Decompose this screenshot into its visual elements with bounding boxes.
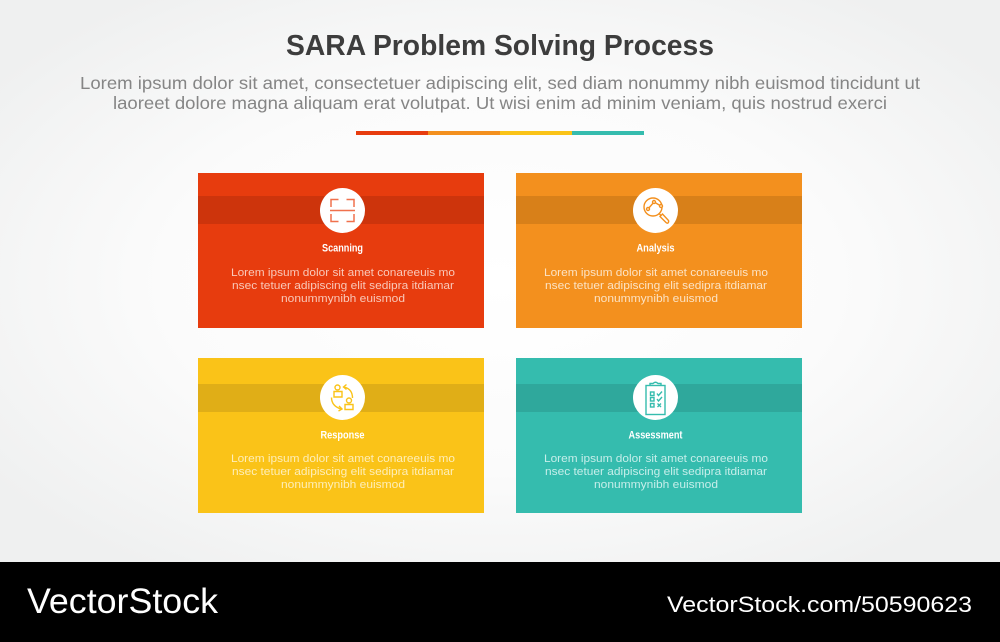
body text: assessment: nsec tetuer adipiscing elit sedipra itdiamar — [545, 466, 767, 478]
body text: assessment — [544, 453, 768, 491]
heading: response: Response — [320, 430, 364, 442]
subtitle text block: laoreet dolore magna aliquam erat volutpat. Ut wisi enim ad minim veniam, quis nostrud exerci — [113, 93, 887, 113]
panel: assessment — [516, 358, 802, 513]
footer image id: VectorStock.com/50590623 — [667, 592, 972, 617]
body text: response: nonummynibh euismod — [281, 479, 405, 491]
footer bar — [0, 562, 1000, 642]
title: SARA Problem Solving Process — [286, 30, 714, 62]
subtitle text block: Lorem ipsum dolor sit amet, consectetuer adipiscing elit, sed diam nonummy nibh euismod tincidunt ut — [80, 73, 920, 93]
four-colour divider — [356, 131, 644, 135]
body text: analysis: nsec tetuer adipiscing elit sedipra itdiamar — [545, 280, 767, 292]
heading: scanning: Scanning — [322, 242, 363, 254]
body text: response: Lorem ipsum dolor sit amet conareeuis mo — [231, 453, 455, 465]
body text: analysis: Lorem ipsum dolor sit amet conareeuis mo — [544, 267, 768, 279]
heading: assessment: Assessment — [628, 430, 683, 442]
icon: magnifier with graph — [644, 198, 669, 223]
icon: scan frame — [330, 200, 355, 222]
body text: assessment: nonummynibh euismod — [594, 479, 718, 491]
panel: scanning — [198, 173, 484, 328]
body text: scanning: Lorem ipsum dolor sit amet conareeuis mo — [231, 267, 455, 279]
icon: clipboard checklist — [646, 382, 665, 414]
panel: response — [198, 358, 484, 513]
body text: scanning: nsec tetuer adipiscing elit sedipra itdiamar — [232, 280, 454, 292]
panel: analysis — [516, 173, 802, 328]
body text: analysis — [544, 267, 768, 305]
subtitle text block — [80, 73, 920, 113]
body text: response — [231, 453, 455, 491]
body text: analysis: nonummynibh euismod — [594, 293, 718, 305]
heading: analysis: Analysis — [636, 242, 674, 254]
body text: scanning — [231, 267, 455, 305]
footer logo text: VectorStock — [27, 582, 219, 621]
body text: assessment: Lorem ipsum dolor sit amet conareeuis mo — [544, 453, 768, 465]
icon: people exchange — [332, 384, 353, 411]
body text: scanning: nonummynibh euismod — [281, 293, 405, 305]
body text: response: nsec tetuer adipiscing elit sedipra itdiamar — [232, 466, 454, 478]
